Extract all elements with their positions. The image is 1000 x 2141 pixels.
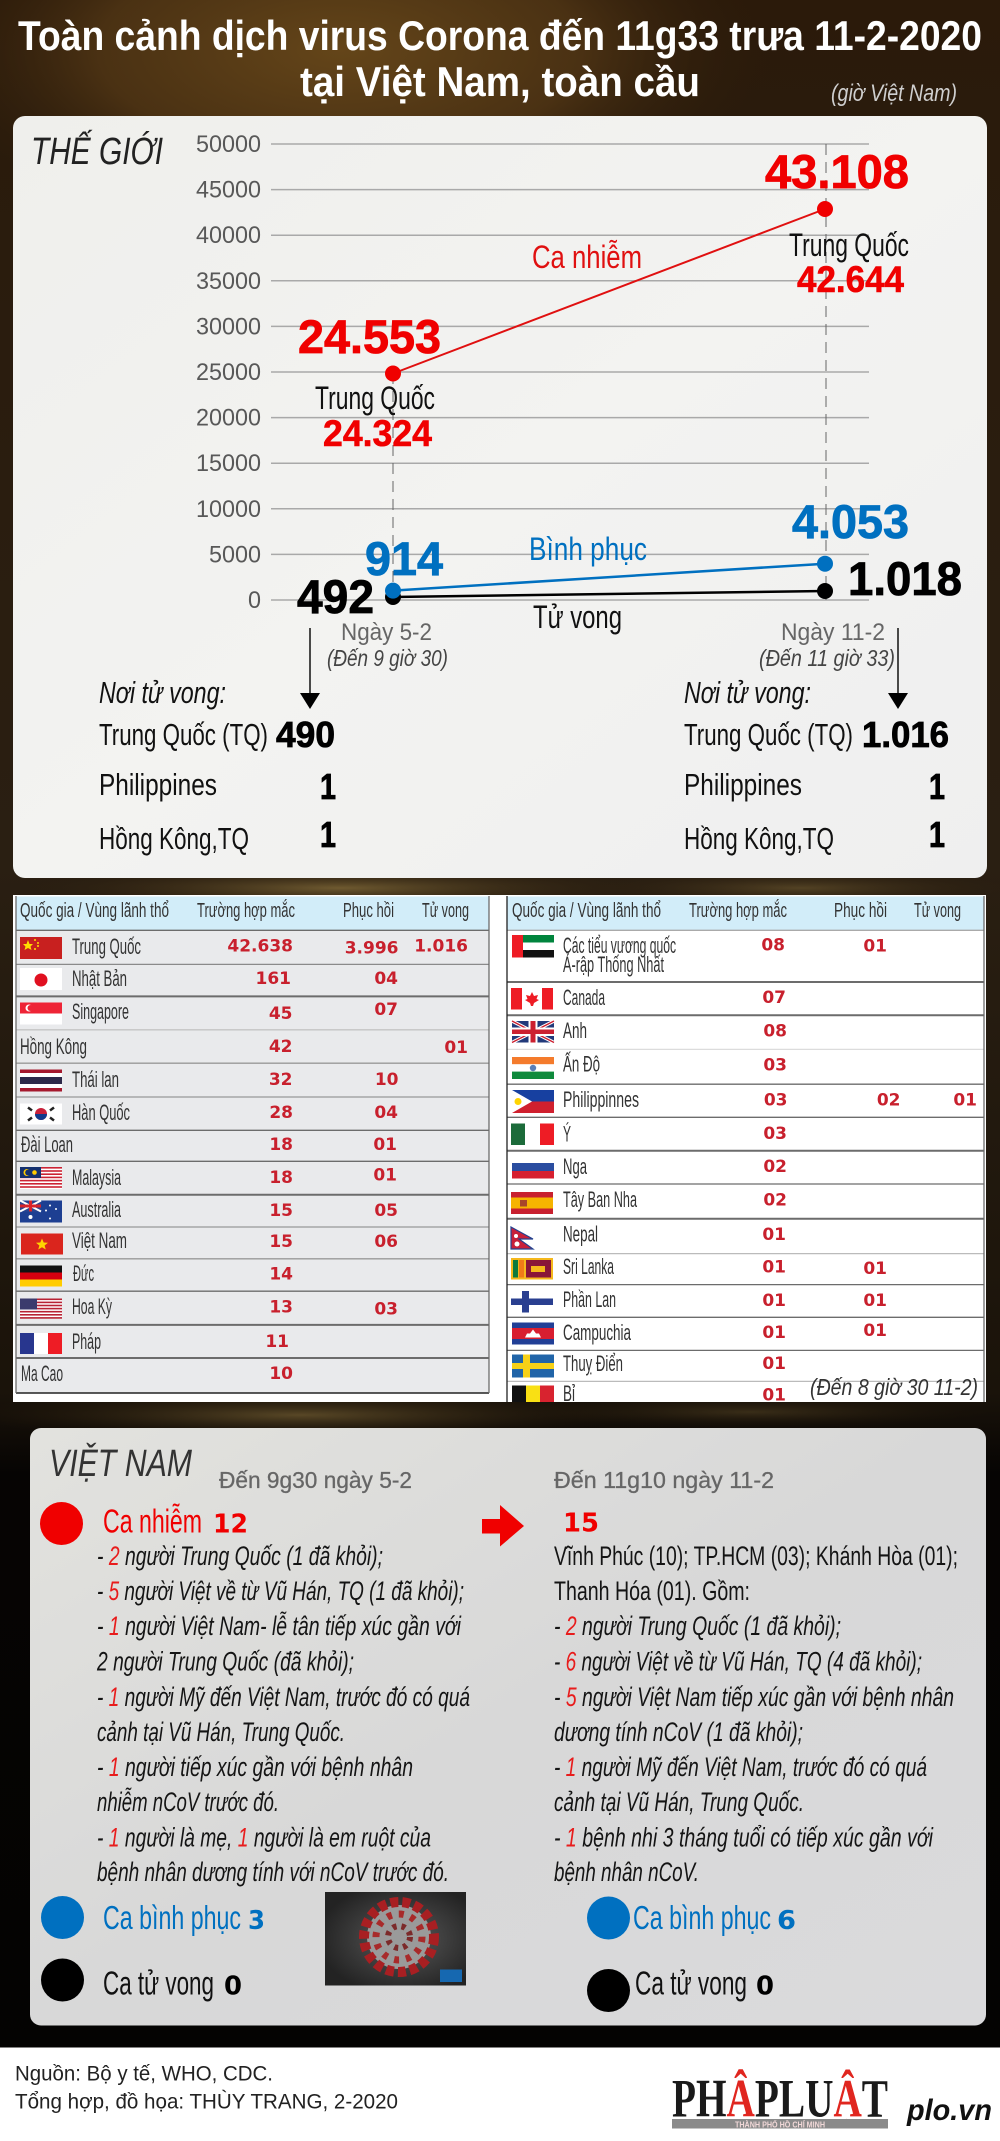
country names: Ý — [563, 1122, 571, 1146]
header row — [20, 899, 469, 922]
deaths list: 11-2: 1 — [929, 814, 945, 855]
series: deaths — [385, 583, 833, 605]
text block: cases 5-2: 2 người Trung Quốc (đã khỏi); — [96, 1646, 354, 1676]
case numbers: 06 — [374, 1232, 398, 1252]
flag: Nepal — [511, 1227, 533, 1249]
axis labels: 10000 — [196, 496, 261, 523]
data labels: Tử vong — [533, 599, 622, 635]
recovered 5-2: 3 — [248, 1906, 265, 1936]
country names: Canada — [563, 985, 605, 1010]
data labels: 4.053 — [792, 495, 909, 548]
text block: cases 11-2: - 2 người Trung Quốc (1 đã khỏi); — [554, 1611, 841, 1641]
date: 5-2: Đến 9g30 ngày 5-2 — [219, 1467, 412, 1493]
arrow: left deaths — [300, 628, 320, 709]
date: 11-2: Đến 11g10 ngày 11-2 — [554, 1467, 774, 1493]
text block: cases 11-2: dương tính nCoV (1 đã khỏi); — [554, 1717, 803, 1747]
deaths list: 11-2: Hồng Kông,TQ — [684, 821, 834, 856]
country names: Nepal — [563, 1222, 598, 1246]
series: infected — [385, 201, 833, 382]
case numbers: 10 — [269, 1364, 293, 1384]
data labels: Bình phục — [529, 531, 647, 567]
infected count 5-2: Ca nhiễm — [103, 1502, 202, 1540]
deaths list: 11-2: Trung Quốc (TQ) — [684, 717, 853, 752]
country names: Thuỵ Điển — [563, 1351, 623, 1376]
title: tại Việt Nam, toàn cầu — [300, 58, 700, 105]
recovered 5-2 — [41, 1896, 265, 1939]
country names: Thái lan — [72, 1067, 119, 1092]
data labels: Trung Quốc — [315, 380, 435, 416]
flag: UK — [512, 1021, 554, 1042]
header row: Trường hợp mắc — [197, 899, 295, 922]
data labels: Ngày 11-2 — [781, 619, 885, 646]
case numbers: 01 — [444, 1038, 468, 1058]
deaths 11-2: 0 — [756, 1972, 774, 2002]
deaths list: 11-2: 1.016 — [862, 714, 949, 755]
data labels: (Đến 9 giờ 30) — [327, 645, 448, 671]
heading: world: THẾ GIỚI — [31, 129, 163, 173]
credits: Tổng hợp, đồ họa: THÙY TRANG, 2-2020 — [15, 2090, 398, 2114]
flag: South Korea — [20, 1104, 62, 1124]
case numbers — [761, 936, 977, 1406]
case numbers: 01 — [953, 1090, 977, 1110]
axis labels: 50000 — [196, 131, 261, 158]
flag: Belgium — [512, 1386, 554, 1402]
recovered 5-2: Ca bình phục — [103, 1899, 241, 1936]
case numbers: 10 — [375, 1070, 399, 1090]
deaths list: 5-2: 1 — [320, 814, 336, 855]
axis labels: 20000 — [196, 405, 261, 432]
footer — [0, 2048, 1000, 2141]
flag: France — [20, 1333, 62, 1354]
flag: Japan — [20, 968, 62, 990]
data labels: 492 — [297, 570, 374, 623]
case numbers: 3.996 — [345, 938, 398, 958]
case numbers: 08 — [763, 1022, 787, 1042]
logo: plo.vn: plo.vn — [906, 2094, 992, 2127]
case numbers: 02 — [877, 1090, 900, 1110]
country names: Hồng Kông — [20, 1034, 87, 1059]
case numbers: 28 — [269, 1103, 293, 1123]
country names: Ma Cao — [21, 1361, 63, 1386]
axis labels: 15000 — [196, 450, 261, 477]
header row: Quốc gia / Vùng lãnh thổ — [512, 900, 661, 922]
credits: Nguồn: Bộ y tế, WHO, CDC. — [15, 2062, 273, 2086]
case numbers: 13 — [269, 1298, 293, 1318]
axis labels: 0 — [248, 587, 261, 614]
deaths list: 11-2: Philippines — [684, 767, 802, 802]
country names: Hoa Kỳ — [72, 1294, 112, 1319]
flag: Italy — [511, 1124, 554, 1145]
recovered 11-2: Ca bình phục — [633, 1899, 771, 1936]
case numbers: 161 — [256, 969, 291, 989]
text block: cases 5-2: nhiễm nCoV trước đó. — [97, 1787, 279, 1817]
case numbers: 02 — [763, 1190, 787, 1210]
deaths 5-2: Ca tử vong — [103, 1964, 214, 2002]
case numbers: 01 — [863, 936, 887, 956]
case numbers: 08 — [761, 936, 785, 956]
header row: Tử vong — [914, 900, 961, 922]
title — [18, 12, 982, 105]
flag: China — [20, 937, 62, 959]
text block: cases 5-2: cảnh tại Vũ Hán, Trung Quốc. — [97, 1717, 345, 1747]
flag: Malaysia — [20, 1167, 62, 1189]
country names: Ả-rập Thống Nhất — [563, 952, 664, 977]
case numbers: 01 — [373, 1135, 397, 1155]
recovered 11-2: 6 — [777, 1906, 796, 1936]
flag: Russia — [512, 1163, 554, 1178]
country names: Đức — [73, 1261, 94, 1286]
heading: Vietnam: VIỆT NAM — [49, 1442, 192, 1485]
case numbers: 45 — [269, 1004, 292, 1024]
country names: Các tiểu vương quốc — [563, 933, 676, 958]
text block: cases 5-2: bệnh nhân dương tính với nCoV trước đó. — [97, 1857, 449, 1887]
country names: Pháp — [72, 1329, 101, 1354]
case numbers: 03 — [764, 1090, 788, 1110]
case numbers: 01 — [863, 1321, 887, 1341]
flag: Spain — [511, 1192, 553, 1214]
text block: cases 5-2: - 1 người Việt Nam- lễ tân tiếp xúc gần với — [97, 1611, 462, 1641]
flag: Canada — [511, 988, 553, 1010]
header row: Trường hợp mắc — [689, 899, 787, 922]
deaths list: 5-2: 490 — [276, 714, 335, 755]
axis labels: 5000 — [209, 541, 261, 568]
case numbers: 01 — [762, 1291, 786, 1311]
country names: Sri Lanka — [563, 1254, 614, 1279]
credits — [15, 2062, 398, 2114]
case numbers: 05 — [374, 1201, 398, 1221]
flag: Finland — [511, 1291, 553, 1312]
text block: cases 11-2 — [554, 1541, 958, 1887]
case numbers: 11 — [265, 1332, 289, 1352]
deaths list: 11-2 — [684, 675, 949, 856]
country names: Phần Lan — [563, 1287, 616, 1312]
header row: Quốc gia / Vùng lãnh thổ — [20, 900, 169, 922]
deaths list: 5-2: Nơi tử vong: — [99, 675, 226, 710]
header row: Tử vong — [422, 900, 469, 922]
case numbers: 1.016 — [414, 936, 468, 956]
data labels: 43.108 — [765, 145, 909, 198]
logo: Pháp Luật: PHÂPLUẬT — [672, 2068, 888, 2128]
country names: Malaysia — [72, 1165, 121, 1190]
case numbers: 18 — [269, 1135, 293, 1155]
flag: USA — [20, 1298, 62, 1319]
flag: Vietnam — [21, 1234, 63, 1254]
arrow: progression — [482, 1505, 524, 1546]
country names: Đài Loan — [21, 1132, 73, 1157]
case numbers: 18 — [269, 1168, 293, 1188]
flag: Sri Lanka — [511, 1258, 553, 1280]
panel: Vietnam — [30, 1428, 986, 2026]
case numbers: 01 — [762, 1258, 786, 1278]
deaths list: 11-2: 1 — [929, 766, 945, 807]
flag: Australia — [20, 1200, 62, 1222]
country names: Trung Quốc — [72, 934, 141, 959]
axis labels: 30000 — [196, 313, 261, 340]
country names: Hàn Quốc — [72, 1100, 130, 1125]
case numbers: 15 — [269, 1201, 293, 1221]
case numbers: 42.638 — [227, 936, 293, 956]
deaths 11-2 — [587, 1964, 774, 2012]
deaths list: 5-2 — [99, 675, 336, 856]
deaths list: 5-2: Philippines — [99, 767, 217, 802]
data labels: Ngày 5-2 — [341, 619, 432, 646]
axis labels: 25000 — [196, 359, 261, 386]
flag: Cambodia — [512, 1322, 554, 1344]
text block: cases 5-2: - 1 người là mẹ, 1 người là em ruột của — [97, 1822, 431, 1852]
text block: cases 11-2: Thanh Hóa (01). Gồm: — [554, 1576, 750, 1606]
flag: Germany — [20, 1266, 62, 1286]
line chart — [196, 131, 962, 671]
deaths 5-2 — [41, 1958, 242, 2002]
deaths list: 11-2: Nơi tử vong: — [684, 675, 811, 710]
case numbers: 04 — [374, 1103, 398, 1123]
country names — [563, 933, 676, 1406]
text block: cases 5-2: - 5 người Việt về từ Vũ Hán, TQ (1 đã khỏi); — [97, 1576, 464, 1606]
country names: Tây Ban Nha — [563, 1187, 637, 1212]
header row — [512, 899, 961, 922]
case numbers: 03 — [374, 1300, 398, 1320]
country names: Philippinnes — [563, 1087, 639, 1112]
country names: Bỉ — [563, 1381, 575, 1406]
country names: Nga — [563, 1154, 587, 1179]
text block: cases 5-2: - 1 người tiếp xúc gần với bệnh nhân — [97, 1752, 413, 1782]
case numbers: 02 — [763, 1157, 787, 1177]
country names: Singapore — [72, 999, 129, 1024]
flag: Philippines — [512, 1090, 554, 1113]
case numbers: 01 — [373, 1166, 397, 1186]
data labels: 24.324 — [323, 413, 432, 454]
case numbers: 07 — [762, 988, 786, 1008]
time zone note: (giờ Việt Nam) — [831, 80, 957, 107]
axis labels: 45000 — [196, 177, 261, 204]
case numbers: 03 — [763, 1056, 787, 1076]
deaths list: 5-2: Hồng Kông,TQ — [99, 821, 249, 856]
country names: Việt Nam — [72, 1228, 127, 1253]
case numbers: 07 — [374, 1000, 398, 1020]
flag: Sweden — [512, 1354, 554, 1378]
deaths 5-2: 0 — [224, 1972, 242, 2002]
icon: red dot — [40, 1502, 83, 1545]
data labels: Ca nhiễm — [532, 239, 642, 275]
case numbers: 04 — [374, 969, 398, 989]
data labels: (Đến 11 giờ 33) — [759, 645, 895, 671]
recovered 11-2 — [587, 1896, 796, 1940]
axis labels: 35000 — [196, 268, 261, 295]
infected count 5-2: 12 — [213, 1510, 248, 1540]
country names: Australia — [72, 1197, 121, 1222]
case numbers: 14 — [269, 1264, 293, 1284]
country names: Nhật Bản — [72, 966, 127, 991]
panel: country tables — [13, 895, 986, 1406]
flag: Singapore — [20, 1002, 62, 1024]
table: left — [16, 896, 489, 1393]
header row: Phục hồi — [343, 900, 394, 922]
country names — [20, 934, 141, 1386]
axis labels — [196, 131, 261, 614]
series: recovered — [385, 556, 833, 599]
case numbers: 01 — [762, 1386, 786, 1406]
deaths 11-2: Ca tử vong — [635, 1964, 747, 2002]
case numbers: 03 — [763, 1124, 787, 1144]
flag: India — [512, 1057, 554, 1079]
data labels: 24.553 — [298, 310, 441, 363]
data labels: 914 — [365, 532, 443, 585]
text block: cases 5-2 — [96, 1541, 470, 1887]
country names: Campuchia — [563, 1320, 631, 1345]
flag: Thailand — [20, 1070, 62, 1092]
case numbers: 01 — [863, 1291, 887, 1311]
country names: Ấn Độ — [563, 1052, 600, 1076]
text block: cases 5-2: - 1 người Mỹ đến Việt Nam, trước đó có quá — [97, 1682, 470, 1712]
case numbers: 32 — [269, 1070, 292, 1090]
deaths list: 5-2: 1 — [320, 766, 336, 807]
flag: UAE — [512, 935, 554, 958]
case numbers: 15 — [269, 1232, 293, 1252]
infected count 11-2: 15 — [563, 1508, 599, 1538]
axis labels: 40000 — [196, 222, 261, 249]
case numbers — [227, 936, 468, 1384]
deaths list: 5-2: Trung Quốc (TQ) — [99, 717, 268, 752]
text block: cases 11-2: cảnh tại Vũ Hán, Trung Quốc. — [554, 1787, 804, 1817]
text block: cases 11-2: bệnh nhân nCoV. — [554, 1857, 699, 1887]
country names: Anh — [563, 1018, 587, 1043]
logo: Pháp Luật: THÀNH PHỐ HỒ CHÍ MINH — [735, 2120, 825, 2130]
table: right — [507, 896, 984, 1406]
case numbers: 01 — [762, 1323, 786, 1343]
case numbers: 01 — [863, 1259, 887, 1279]
text block: cases 5-2: - 2 người Trung Quốc (1 đã khỏi); — [97, 1541, 383, 1571]
data labels: 42.644 — [797, 259, 904, 300]
data labels: Trung Quốc — [789, 227, 909, 263]
image: coronavirus — [325, 1892, 466, 1986]
panel: world — [13, 116, 987, 878]
case numbers: 01 — [762, 1354, 786, 1374]
header row: Phục hồi — [834, 900, 887, 922]
case numbers: 01 — [762, 1225, 786, 1245]
data labels: 1.018 — [848, 552, 962, 605]
arrow: right deaths — [888, 628, 908, 709]
case numbers: 42 — [269, 1037, 292, 1057]
data labels — [297, 145, 962, 671]
